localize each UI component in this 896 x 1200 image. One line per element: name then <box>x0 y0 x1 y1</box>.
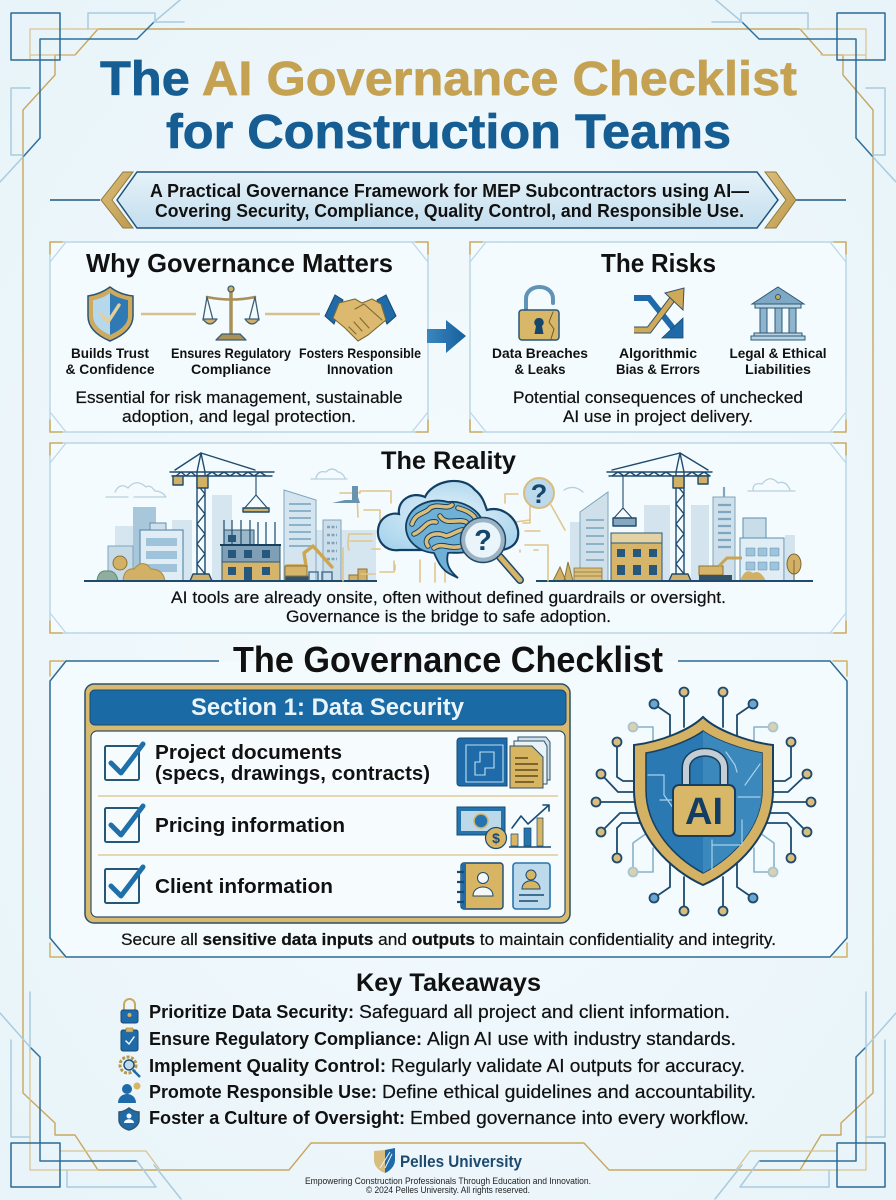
wordmark: Pelles University <box>400 1152 522 1171</box>
takeaway: data security <box>121 999 730 1023</box>
footer <box>305 1148 591 1195</box>
heading: The Risks <box>601 248 716 278</box>
takeaway: responsible use: Promote Responsible Use: <box>149 1082 377 1102</box>
panel: why governance matters <box>50 242 428 432</box>
subtitle banner: A Practical Governance Framework for MEP Subcontractors using AI— <box>150 180 749 201</box>
label: ensures compliance: Ensures Regulatory <box>171 345 291 361</box>
icon: crossing arrows <box>634 288 684 338</box>
label: builds trust: & Confidence <box>66 361 155 377</box>
takeaway: culture of oversight: Embed governance into every workflow. <box>410 1108 749 1128</box>
card: section 1 data security <box>85 684 570 923</box>
label: builds trust <box>66 345 155 377</box>
magnifier lens <box>463 520 503 560</box>
arrow between panels <box>427 320 466 353</box>
takeaway: culture of oversight: Foster a Culture of Oversight: <box>149 1108 405 1128</box>
label: ensures compliance: Compliance <box>191 361 271 377</box>
description: Governance is the bridge to safe adoption. <box>286 607 611 626</box>
circuit traces <box>596 692 811 911</box>
illustration: AI shield with circuit <box>592 688 816 916</box>
label: data breaches <box>492 345 588 377</box>
icon: money and chart: $ <box>492 830 500 846</box>
takeaway: culture of oversight <box>119 1108 749 1130</box>
label: data breaches: Data Breaches <box>492 345 588 361</box>
heading: Key Takeaways <box>356 969 541 997</box>
icon: question bubble <box>524 478 554 509</box>
icon: contact book and id card <box>457 863 550 909</box>
takeaway: quality control <box>120 1056 745 1077</box>
takeaway: data security: Safeguard all project and client information. <box>359 1002 730 1022</box>
ground <box>536 580 813 582</box>
bushes <box>123 564 165 581</box>
illustration: AI shield with circuit: AI <box>685 791 723 833</box>
description <box>513 388 803 426</box>
label: algorithmic bias: Algorithmic <box>619 345 697 361</box>
title: for Construction Teams <box>166 106 731 159</box>
magnifier handle <box>500 557 520 580</box>
takeaway: data security: Prioritize Data Security: <box>149 1002 354 1022</box>
right crane <box>607 453 712 581</box>
logo: Pelles University shield <box>374 1148 395 1173</box>
row: client information <box>105 863 550 909</box>
label: legal liabilities <box>730 345 826 377</box>
label: fosters innovation <box>299 345 421 377</box>
label: legal liabilities: Legal & Ethical <box>730 345 826 361</box>
label: algorithmic bias: Bias & Errors <box>616 361 700 377</box>
clouds <box>106 483 166 497</box>
icon: shield <box>88 287 133 341</box>
equipment and stacks <box>699 566 723 575</box>
description <box>76 388 402 426</box>
illustration: brain in cloud with magnifier: ? <box>474 525 492 557</box>
excavator <box>285 546 332 581</box>
illustration: left city <box>84 453 377 581</box>
takeaway: regulatory compliance: Ensure Regulatory Compliance: <box>149 1029 422 1049</box>
label: ensures compliance <box>171 345 291 377</box>
checklist body <box>91 731 565 917</box>
illustration: circuit traces <box>340 491 565 582</box>
section header <box>90 690 566 725</box>
label: fosters innovation: Fosters Responsible <box>299 345 421 361</box>
padlock <box>686 752 724 785</box>
row: project documents: Project documents <box>155 742 342 764</box>
description: AI tools are already onsite, often without defined guardrails or oversight. <box>171 588 726 607</box>
label: fosters innovation: Innovation <box>327 361 393 377</box>
takeaway: quality control: Implement Quality Control: <box>149 1056 386 1076</box>
takeaway: responsible use: Define ethical guidelines and accountability. <box>382 1082 756 1102</box>
panel: the risks <box>470 242 846 432</box>
takeaway: quality control: Regularly validate AI outputs for accuracy. <box>391 1056 745 1076</box>
title <box>100 53 797 159</box>
label: algorithmic bias <box>616 345 700 377</box>
connector lines <box>141 313 320 315</box>
label: data breaches: & Leaks <box>514 361 566 377</box>
tagline: Empowering Construction Professionals Through Education and Innovation. <box>305 1176 591 1187</box>
description: AI use in project delivery. <box>563 407 753 426</box>
icon: classical building <box>751 287 805 340</box>
subtitle banner <box>50 172 846 228</box>
section header: Section 1: Data Security <box>191 694 465 721</box>
icon: broken padlock <box>519 287 559 340</box>
construction building <box>222 545 280 562</box>
heading: Why Governance Matters <box>86 248 393 278</box>
row: project documents: (specs, drawings, contracts) <box>155 763 430 785</box>
caption: Secure all sensitive data inputs and outputs to maintain confidentiality and integrity. <box>121 930 776 949</box>
icon: handshake <box>325 295 396 341</box>
description <box>171 588 726 626</box>
illustration: right city <box>536 453 813 581</box>
boxes and equipment <box>309 572 332 581</box>
ground <box>84 580 377 582</box>
icon: money and chart <box>457 805 551 848</box>
copyright: © 2024 Pelles University. All rights reserved. <box>366 1185 530 1195</box>
row: pricing information: Pricing information <box>155 815 345 837</box>
icon: blueprint and documents <box>457 737 550 788</box>
description: adoption, and legal protection. <box>122 407 356 426</box>
takeaway: regulatory compliance: Align AI use with industry standards. <box>427 1029 736 1049</box>
clouds <box>748 479 795 491</box>
row: client information: Client information <box>155 876 333 898</box>
label: legal liabilities: Liabilities <box>745 361 811 377</box>
subtitle banner: Covering Security, Compliance, Quality Control, and Responsible Use. <box>155 200 744 221</box>
icon: signal mast <box>332 486 360 503</box>
shield <box>634 717 773 885</box>
left crane <box>170 453 274 581</box>
section: key takeaways <box>118 969 756 1130</box>
description: Essential for risk management, sustainable <box>76 388 402 407</box>
heading: The Reality <box>381 447 516 475</box>
icon: question bubble: ? <box>531 479 547 509</box>
takeaway: regulatory compliance <box>121 1028 736 1051</box>
label: builds trust: Builds Trust <box>71 345 149 361</box>
icon: scales of justice <box>203 286 259 340</box>
row: project documents <box>105 737 550 788</box>
panel: the reality <box>50 443 846 633</box>
panel: the governance checklist <box>50 639 847 957</box>
takeaway: responsible use <box>118 1082 756 1103</box>
illustration: brain in cloud with magnifier <box>378 481 520 580</box>
heading: The Governance Checklist <box>233 639 663 680</box>
description: Potential consequences of unchecked <box>513 388 803 407</box>
row: pricing information <box>105 805 551 848</box>
title: The AI Governance Checklist <box>100 53 797 106</box>
